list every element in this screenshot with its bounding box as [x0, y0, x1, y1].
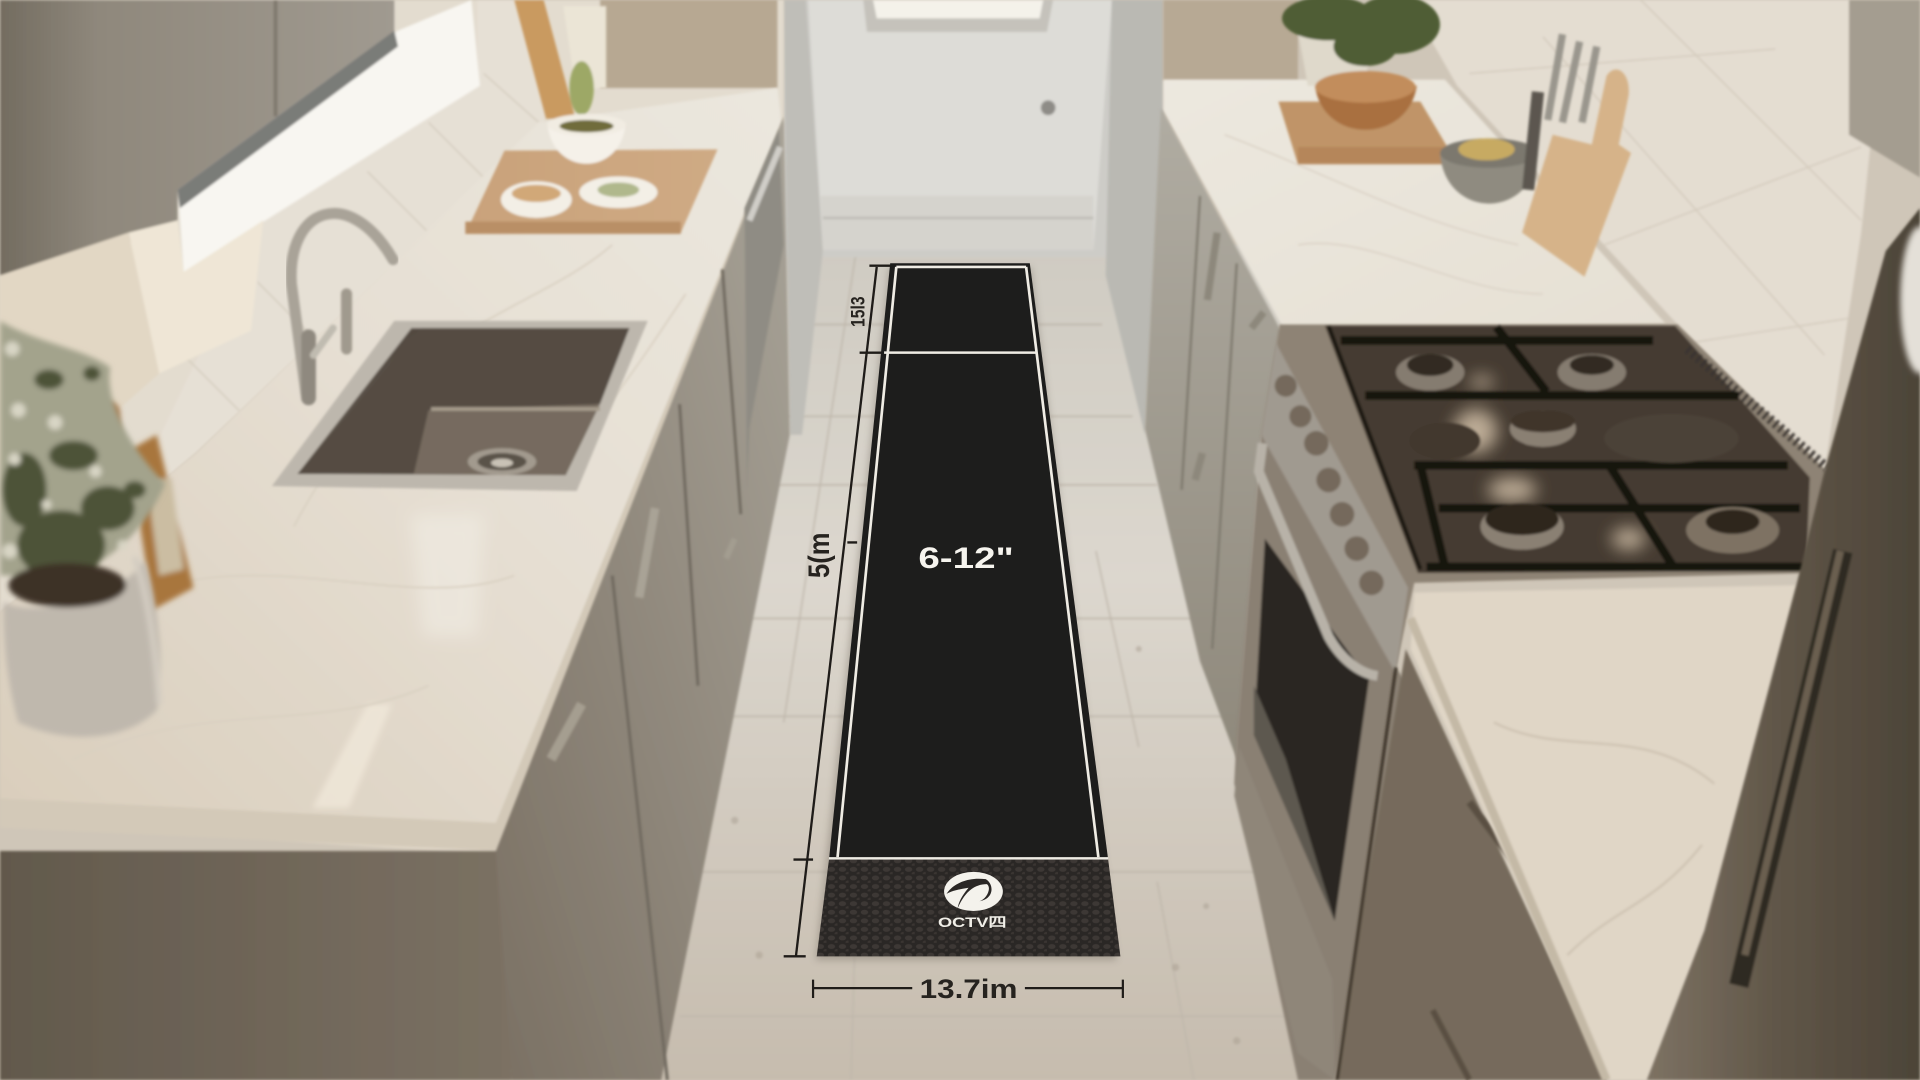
logo wordmark: OCTV四: [938, 915, 1007, 930]
mat body: [829, 263, 1108, 860]
right cabinets: [1145, 108, 1281, 759]
left countertop: [0, 88, 784, 855]
back door: [784, 0, 1163, 435]
floor: [637, 245, 1322, 1080]
mat logo: [938, 872, 1007, 930]
vent slots: [1687, 349, 1827, 468]
cooktop grates: [1329, 326, 1806, 569]
left cabinets: [0, 116, 790, 1080]
gas range cooktop: [1261, 324, 1827, 667]
left dimension line with ticks: [784, 266, 890, 956]
refrigerator, far right: [1647, 208, 1920, 1080]
mat inner white border lines: [829, 267, 1108, 858]
window and wall cabinet, upper left: [0, 0, 480, 514]
cooktop reflections: [1453, 376, 1646, 550]
textured mat end panel: [817, 860, 1120, 956]
potted plant and bottle: [0, 321, 193, 737]
cutting board with bowls, left counter: [465, 0, 718, 234]
faucet: [291, 213, 393, 398]
main length label: 5(m: [803, 533, 836, 578]
upper length label: 15l3: [847, 296, 869, 327]
width label: 13.7im: [920, 974, 1018, 1004]
lower right cabinets: [1335, 649, 1607, 1080]
sink: [272, 321, 648, 491]
right countertop: [1163, 80, 1665, 328]
mat shadow: [816, 267, 1117, 960]
lower right countertop: [1411, 585, 1796, 1080]
items on right counter: plant, board, bowls, knives: [1278, 0, 1631, 277]
mat centre measurement: 6-12": [918, 542, 1014, 575]
oven front with knobs, door and handle: [1234, 343, 1408, 1080]
black runner mat: [817, 263, 1120, 956]
right wall and backsplash: [1163, 0, 1920, 471]
bottom width dimension: [813, 974, 1123, 1004]
left wall and backsplash: [0, 0, 784, 612]
